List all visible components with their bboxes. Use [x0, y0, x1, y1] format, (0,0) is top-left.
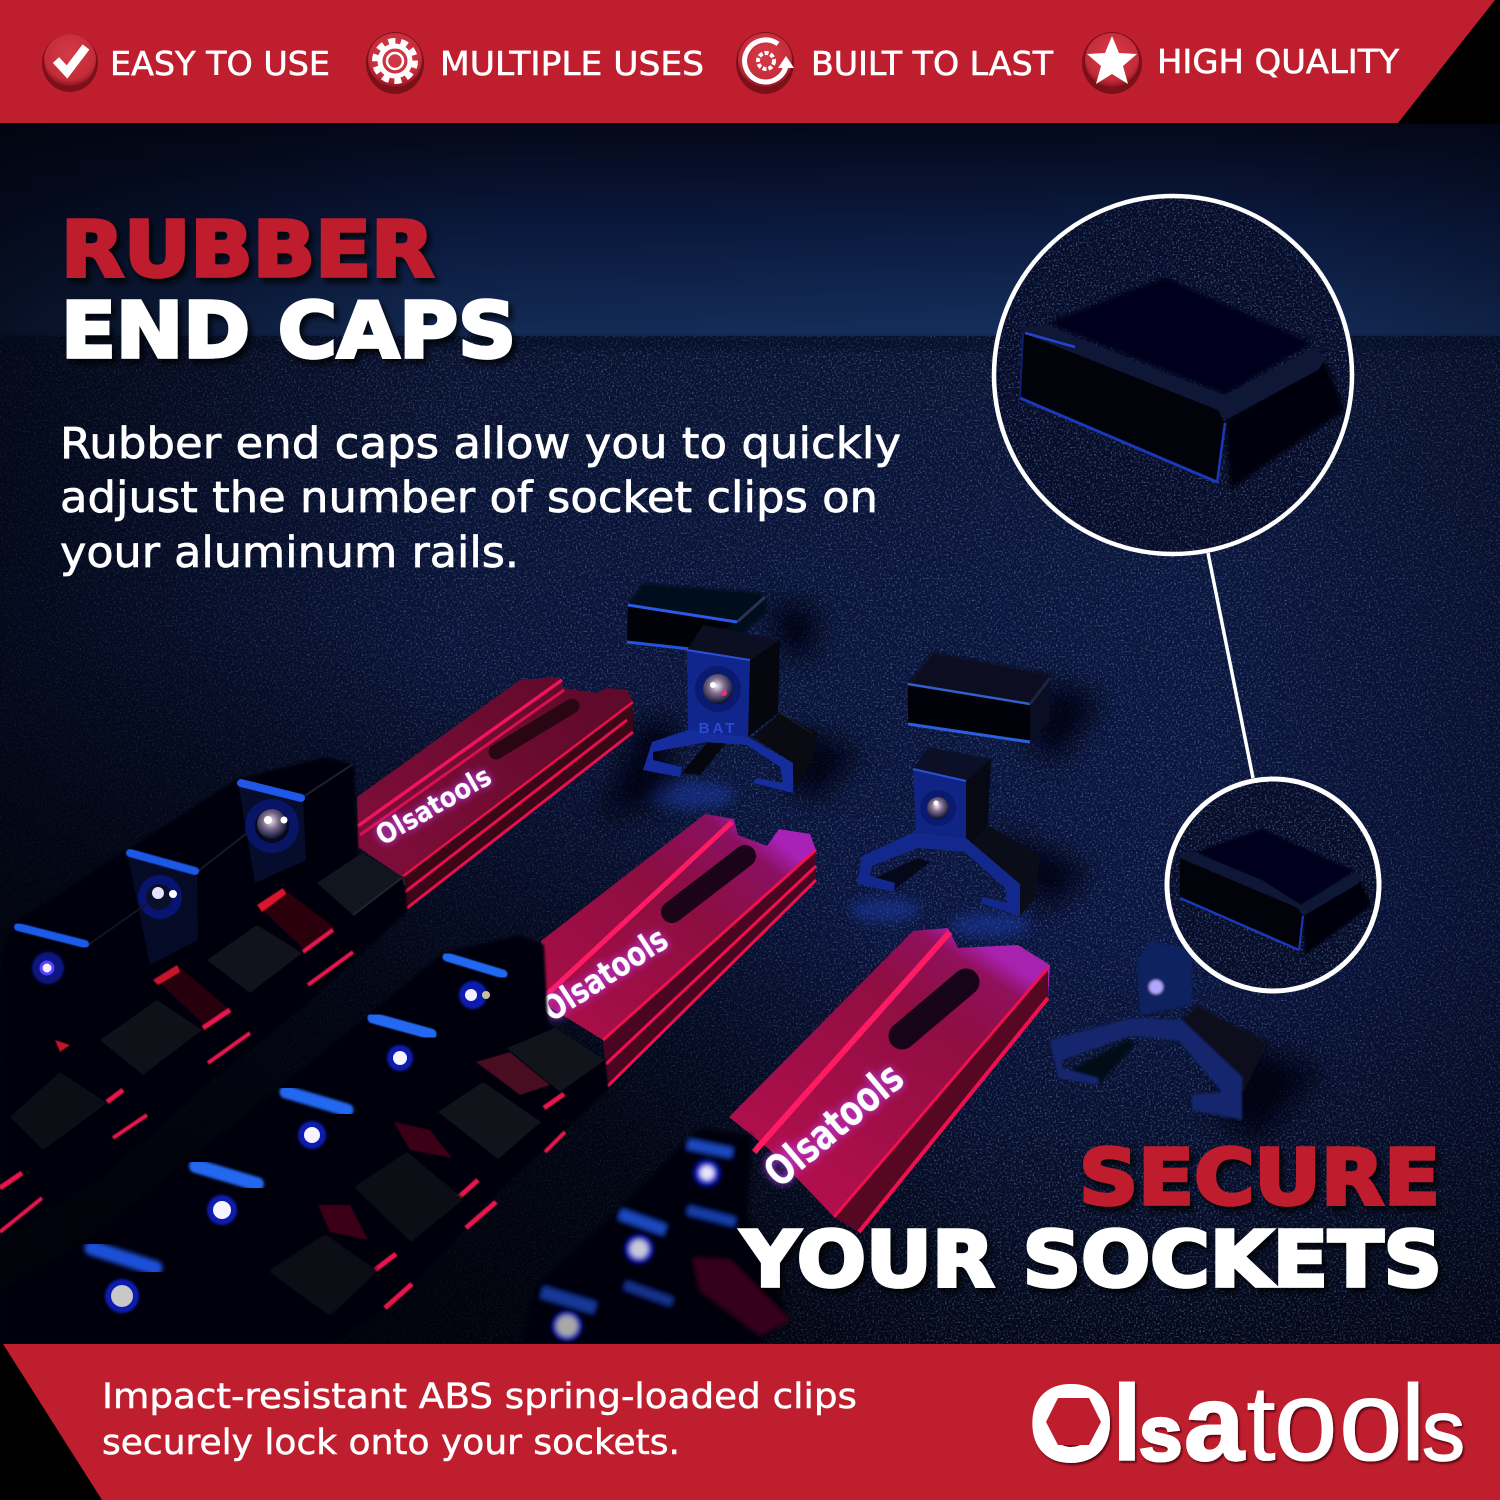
clip 4 — [10, 1072, 107, 1150]
bottom description: Impact-resistant ABS spring-loaded clips — [102, 1377, 857, 1417]
heading: rubber end caps: RUBBER — [61, 206, 434, 295]
feature: high quality: HIGH QUALITY — [1157, 42, 1400, 81]
heading: rubber end caps — [61, 206, 516, 376]
shadows on table — [600, 600, 1320, 1140]
rubber end cap: middle — [908, 652, 1050, 742]
bottom description — [102, 1377, 857, 1463]
loose socket clip: middle — [857, 747, 1040, 916]
rail logo: Olsatools — [535, 919, 676, 1030]
bottom corner — [0, 1344, 102, 1500]
brand logo: l — [1112, 1362, 1142, 1483]
rail logo: Olsatools — [754, 1052, 913, 1197]
rail section under middle clips — [318, 1052, 565, 1308]
clip 2 — [127, 833, 302, 993]
rail slot — [672, 856, 745, 912]
rubber end cap: back — [627, 583, 767, 649]
clip 1 — [238, 764, 405, 915]
clip engraving: BAT — [699, 720, 737, 737]
body text: adjust the number of socket clips on — [60, 473, 878, 523]
rail section under clips — [0, 888, 353, 1232]
icon: gear — [366, 32, 424, 94]
feature: built to last — [736, 32, 1054, 94]
icon: check mark — [42, 34, 98, 92]
loose socket clip: back — [643, 625, 818, 793]
connector line — [1208, 553, 1253, 778]
clip 4 — [196, 1166, 378, 1316]
clip 2 — [620, 1214, 672, 1302]
feature: easy to use: EASY TO USE — [110, 44, 330, 83]
bottom banner — [3, 1344, 1500, 1500]
socket clips: middle row — [92, 957, 605, 1316]
clip 2 — [373, 1018, 541, 1159]
brand logo: o — [1339, 1358, 1402, 1485]
aluminum rail: front — [729, 928, 1050, 1232]
magnifier circle: large — [990, 190, 1360, 560]
clip 1 — [688, 1144, 735, 1222]
brand logo: s — [1422, 1383, 1465, 1479]
brand logo: o — [1274, 1358, 1337, 1485]
brand logo — [1030, 1358, 1465, 1485]
feature: high quality — [1082, 32, 1400, 94]
icon: gear with arrow — [736, 32, 794, 94]
brand logo: a — [1184, 1362, 1245, 1483]
icon: star — [1082, 32, 1142, 94]
brand logo: O — [1030, 1365, 1112, 1483]
socket clips: back row — [10, 764, 405, 1150]
clip 5 — [92, 1248, 155, 1313]
heading: secure your sockets — [740, 1134, 1442, 1305]
clip 1 — [447, 957, 605, 1092]
brand logo: s — [1139, 1389, 1182, 1477]
magnifier circle: small — [1165, 777, 1381, 993]
rail end under clips — [693, 1258, 790, 1335]
heading: secure your sockets: YOUR SOCKETS — [740, 1216, 1442, 1305]
clip row silhouette: middle — [0, 935, 608, 1344]
body text — [60, 419, 901, 578]
clip row silhouette: back — [0, 757, 407, 1240]
end cap closeup — [1180, 829, 1372, 955]
aluminum rail: back left — [357, 677, 633, 910]
clip 3 — [542, 1292, 595, 1338]
socket clips: front row — [520, 1128, 790, 1344]
loose socket clip: right — [1050, 941, 1267, 1120]
feature: built to last: BUILT TO LAST — [811, 44, 1054, 83]
body text: Rubber end caps allow you to quickly — [60, 419, 901, 469]
feature: multiple uses: MULTIPLE USES — [440, 44, 704, 83]
brand logo: l — [1401, 1362, 1425, 1483]
rail slot — [902, 982, 966, 1036]
bottom description: securely lock onto your sockets. — [102, 1423, 680, 1463]
clip 3 — [286, 1092, 464, 1242]
clip silhouette — [520, 1128, 790, 1344]
brand logo: t — [1246, 1362, 1276, 1483]
top corner — [1398, 0, 1500, 124]
aluminum rail: middle — [535, 814, 816, 1087]
rail slot — [496, 706, 572, 752]
feature: easy to use — [42, 34, 330, 92]
clip 3 — [18, 905, 202, 1075]
body text: your aluminum rails. — [60, 528, 519, 578]
end cap closeup — [1020, 277, 1345, 490]
heading: secure your sockets: SECURE — [1079, 1134, 1440, 1223]
rail logo: Olsatools — [370, 759, 497, 852]
top banner — [0, 0, 1495, 123]
blue light reflections on table — [645, 781, 1030, 937]
heading: rubber end caps: END CAPS — [61, 287, 516, 376]
feature: multiple uses — [366, 32, 704, 94]
